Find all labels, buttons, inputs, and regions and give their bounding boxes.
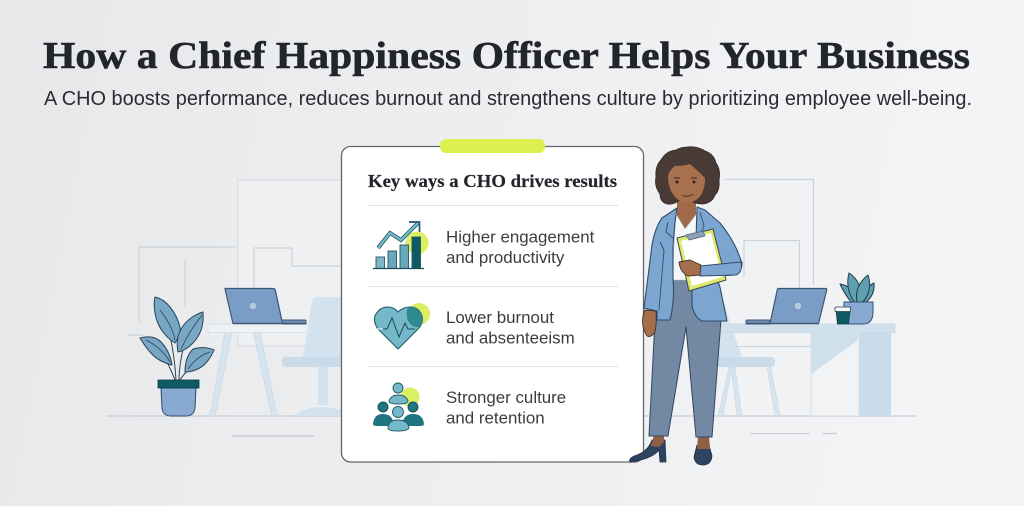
office background, right bbox=[640, 180, 917, 434]
item text: engagement: and productivity bbox=[446, 248, 565, 267]
item text: engagement: Higher engagement bbox=[446, 228, 595, 246]
left laptop bbox=[225, 288, 306, 324]
accent tab bbox=[440, 139, 545, 153]
subtitle: A CHO boosts performance, reduces burnout and strengthens culture by prioritizing employee well-being. bbox=[44, 88, 972, 110]
forearm and hand bbox=[700, 262, 741, 276]
clipboard bbox=[677, 229, 726, 291]
facial features bbox=[674, 178, 697, 196]
illustration: woman with clipboard bbox=[630, 147, 742, 465]
blazer bbox=[644, 208, 677, 320]
item text: burnout: Lower burnout bbox=[446, 308, 554, 327]
trousers bbox=[649, 279, 721, 437]
office background, left bbox=[107, 180, 348, 436]
left hand bbox=[642, 310, 656, 336]
panel: key ways card bbox=[342, 139, 644, 462]
neck bbox=[677, 198, 696, 230]
card heading: Key ways a CHO drives results bbox=[368, 171, 617, 191]
coffee cup bbox=[835, 307, 850, 324]
shoes bbox=[630, 440, 712, 465]
icon: rising bar chart bbox=[373, 222, 428, 268]
right laptop bbox=[746, 288, 827, 324]
left potted plant bbox=[140, 297, 214, 416]
item text: culture: and retention bbox=[446, 408, 545, 428]
icon: group of people bbox=[373, 383, 424, 431]
hair bbox=[656, 147, 720, 204]
left chair bbox=[282, 297, 342, 416]
right desk bbox=[720, 324, 895, 416]
icon: heart with pulse bbox=[370, 303, 430, 349]
right potted plant bbox=[840, 273, 874, 324]
left desk bbox=[208, 324, 343, 416]
face bbox=[668, 164, 705, 203]
ankle skin bbox=[651, 435, 710, 449]
title: How a Chief Happiness Officer Helps Your Business bbox=[43, 35, 970, 77]
item text: culture: Stronger culture bbox=[446, 388, 566, 407]
white blouse bbox=[672, 212, 705, 280]
item text: burnout: and absenteeism bbox=[446, 328, 575, 348]
right chair bbox=[705, 297, 780, 416]
